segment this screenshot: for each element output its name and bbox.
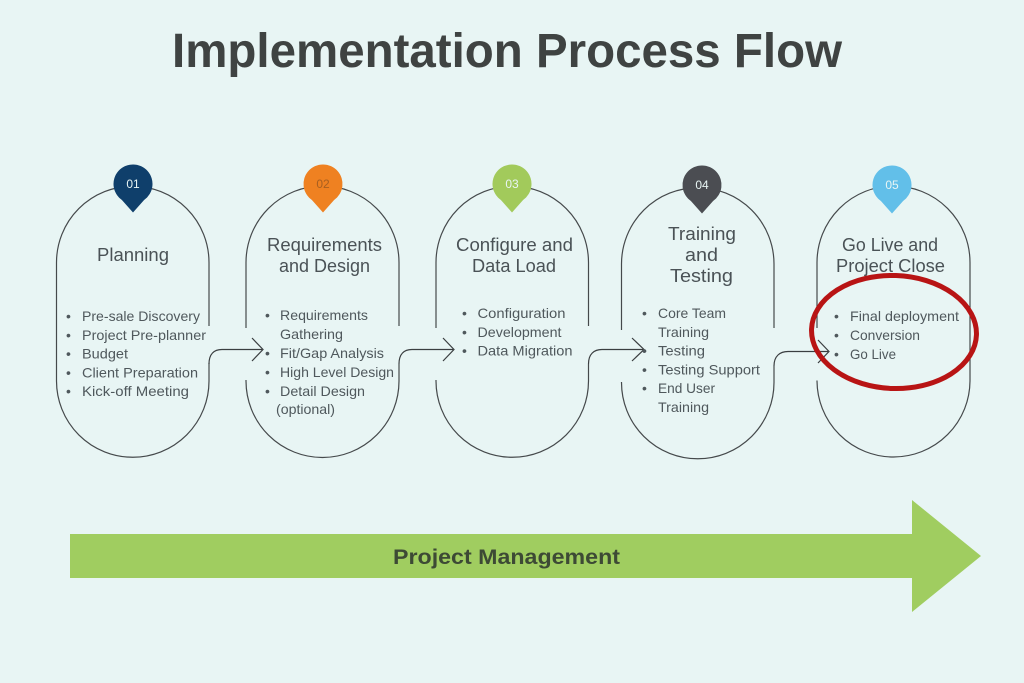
pin 05: 05 [885, 178, 899, 192]
step 3: configure and data load [436, 164, 644, 457]
list: planning: Project Pre-planner [82, 327, 206, 343]
heading: configure and data load: Data Load [472, 256, 556, 276]
list: training and testing: Training [658, 324, 709, 340]
capsule outline 3 [436, 186, 588, 457]
list: go live and project close [834, 308, 959, 362]
list: planning: Client Preparation [82, 364, 198, 380]
heading: requirements and design [267, 235, 382, 276]
list: planning: Budget [82, 346, 128, 362]
list: go live and project close: • [834, 327, 839, 343]
list: requirements and design: Detail Design [280, 383, 365, 399]
capsule outline 4 [622, 188, 774, 459]
step 1: planning [56, 164, 263, 457]
list: requirements and design: Gathering [280, 326, 343, 342]
list: go live and project close: • [834, 308, 839, 324]
list: configure and data load: Configuration [478, 305, 566, 321]
list: configure and data load [462, 305, 572, 358]
list: training and testing: Testing [658, 342, 705, 358]
list: configure and data load: • [462, 305, 467, 321]
list: training and testing: Training [658, 399, 709, 415]
list: planning: • [66, 364, 71, 380]
pin 04 [682, 165, 722, 214]
list: training and testing: • [642, 305, 647, 321]
list: requirements and design: • [265, 345, 270, 361]
pin 03: 03 [505, 177, 519, 191]
list: go live and project close: Go Live [850, 346, 896, 362]
list: training and testing [642, 305, 760, 415]
heading: go live and project close: Go Live and [842, 235, 938, 255]
step 2: requirements and design [246, 164, 454, 458]
list: training and testing: • [642, 380, 647, 396]
capsule outline 5 [817, 186, 970, 457]
list: planning [66, 308, 206, 399]
heading: go live and project close: Project Close [836, 256, 945, 276]
capsule outline 1 [56, 186, 209, 457]
list: training and testing: • [642, 362, 647, 378]
list: configure and data load: Development [478, 324, 562, 340]
connector arrow 2 to 3 [399, 338, 454, 364]
list: planning: Pre-sale Discovery [82, 308, 200, 324]
heading: requirements and design: Requirements [267, 235, 382, 255]
list: planning: • [66, 383, 71, 399]
connector arrow 4 to 5 [774, 340, 829, 366]
list: go live and project close: • [834, 346, 839, 362]
list: training and testing: Testing Support [658, 362, 760, 378]
list: go live and project close: Conversion [850, 327, 920, 343]
pin 04: 04 [695, 178, 709, 192]
list: planning: • [66, 327, 71, 343]
list: requirements and design: • [265, 307, 270, 323]
pin 05 [872, 165, 912, 214]
pin 02 [303, 164, 342, 212]
heading: go live and project close [836, 235, 945, 276]
heading: configure and data load [456, 235, 573, 276]
step 5: go live and project close [810, 165, 978, 457]
list: planning: Kick-off Meeting [82, 383, 189, 399]
heading: configure and data load: Configure and [456, 235, 573, 255]
list: requirements and design [265, 307, 394, 417]
list: training and testing: End User [658, 380, 715, 396]
heading: planning: Planning [97, 245, 169, 265]
heading: training and testing: Training [668, 224, 736, 244]
heading: training and testing: Testing [670, 266, 733, 286]
list: configure and data load: Data Migration [478, 342, 572, 358]
pin 01 [114, 164, 152, 212]
list: training and testing: • [642, 342, 647, 358]
list: configure and data load: • [462, 324, 467, 340]
connector arrow 3 to 4 [588, 338, 644, 364]
connector arrow 1 to 2 [209, 338, 263, 364]
project management arrow [70, 500, 981, 612]
pin 02: 02 [316, 177, 330, 191]
capsule outline 2 [246, 186, 399, 458]
list: planning: • [66, 346, 71, 362]
title: Implementation Process Flow [172, 25, 843, 78]
list: requirements and design: • [265, 364, 270, 380]
list: requirements and design: Fit/Gap Analysis [280, 345, 384, 361]
list: requirements and design: (optional) [276, 401, 335, 417]
list: requirements and design: High Level Design [280, 364, 394, 380]
heading: requirements and design: and Design [279, 256, 370, 276]
arrow label: Project Management [393, 546, 620, 569]
list: requirements and design: Requirements [280, 307, 368, 323]
heading: training and testing [668, 224, 736, 286]
list: go live and project close: Final deployment [850, 308, 959, 324]
callout: red highlight ellipse [810, 273, 978, 391]
pin 03 [492, 164, 532, 212]
list: planning: • [66, 308, 71, 324]
list: requirements and design: • [265, 383, 270, 399]
heading: training and testing: and [685, 245, 718, 265]
step 4: training and testing [622, 165, 829, 459]
pin 01: 01 [126, 177, 140, 191]
list: configure and data load: • [462, 342, 467, 358]
list: training and testing: Core Team [658, 305, 726, 321]
